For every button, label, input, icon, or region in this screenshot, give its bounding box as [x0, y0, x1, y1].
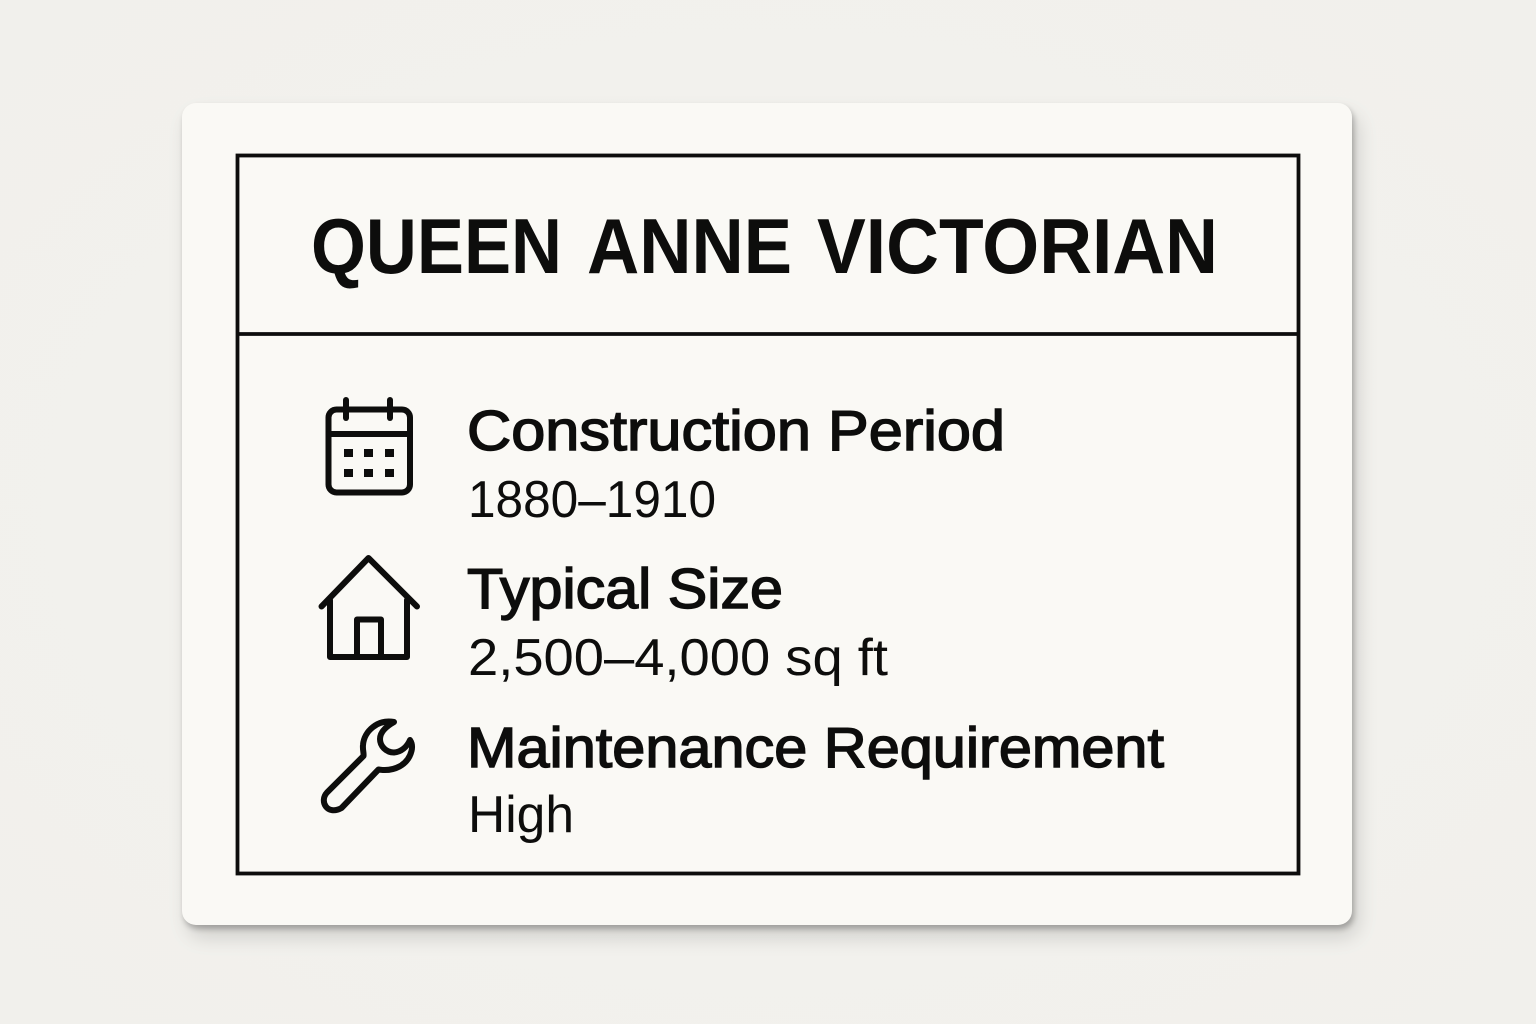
heading: typical size: Typical Size	[467, 557, 783, 621]
panel: frame	[238, 156, 1298, 874]
title: QUEEN	[311, 202, 562, 290]
title: ANNE	[587, 202, 792, 290]
card shadow	[184, 107, 1358, 937]
heading: construction period: Construction Period	[467, 399, 1005, 463]
title	[311, 202, 1218, 290]
row: typical size	[467, 557, 888, 686]
title: VICTORIAN	[817, 202, 1218, 290]
row: maintenance requirement	[467, 716, 1164, 843]
value: construction period: 1880–1910	[468, 470, 716, 528]
icon: house	[322, 558, 417, 657]
value: maintenance requirement: High	[468, 785, 574, 843]
icon: wrench	[324, 722, 412, 810]
heading: maintenance requirement: Maintenance Requirement	[467, 716, 1164, 780]
value: typical size: 2,500–4,000 sq ft	[468, 628, 888, 686]
icon: calendar	[328, 400, 410, 492]
row: construction period	[467, 399, 1005, 528]
panel: card	[182, 103, 1352, 925]
